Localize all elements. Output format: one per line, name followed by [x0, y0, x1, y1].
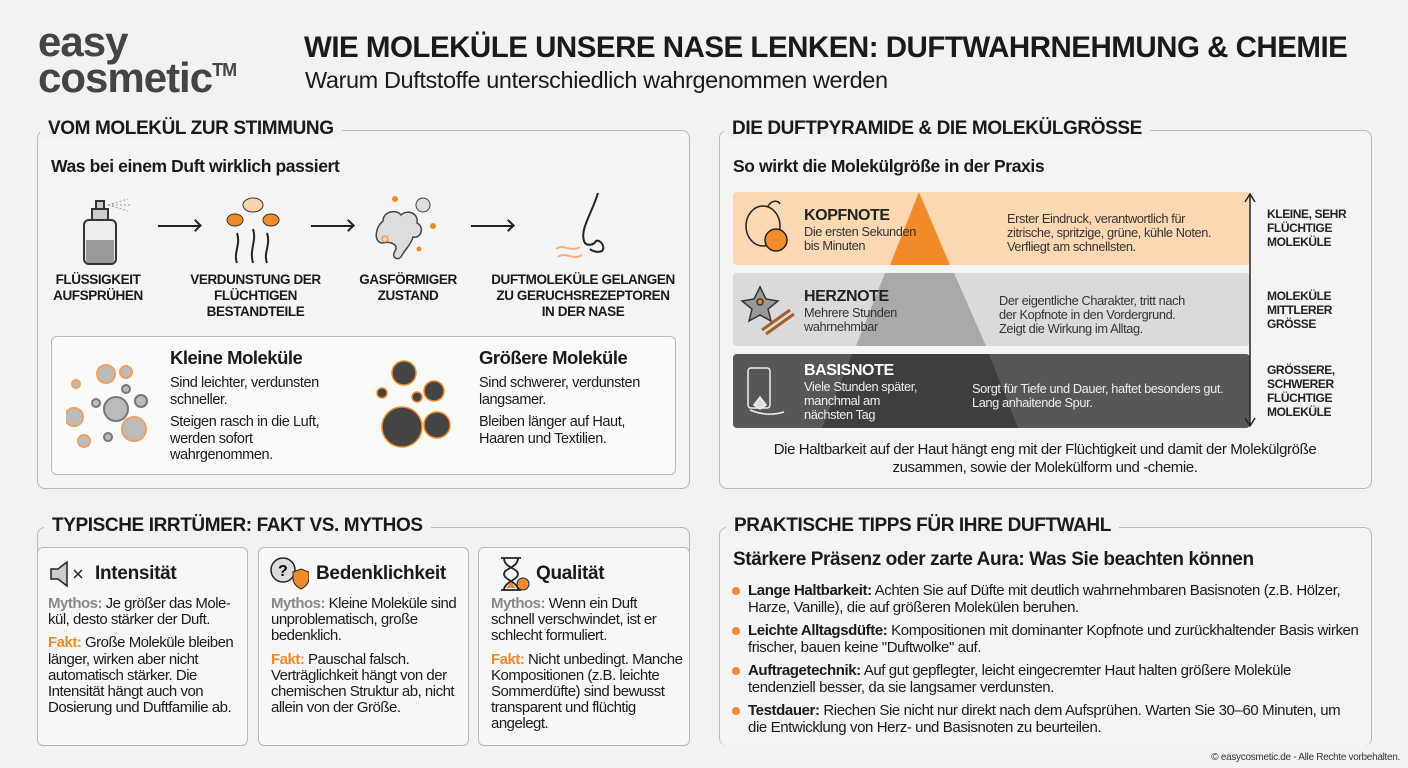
icon: nose: [556, 192, 604, 258]
text: Verfliegt am schnellsten.: [1007, 239, 1136, 254]
text: größere moleküle: Größere Moleküle: [479, 347, 627, 368]
text: manchmal am: [804, 393, 880, 408]
text: MOLEKÜLE: [1267, 404, 1332, 419]
card: qualität: [478, 547, 690, 746]
text: Mehrere Stunden: [804, 305, 897, 320]
tips list: Testdauer: Riechen Sie nicht nur direkt nach dem Aufsprühen. Warten Sie 30–60 Minuten, um die Entwicklung von Herz- und Basisnoten zu beurteilen.: [748, 702, 1340, 736]
heading: DIE DUFTPYRAMIDE & DIE MOLEKÜLGRÖSSE: [732, 118, 1142, 139]
text: größere moleküle: [479, 347, 640, 446]
panel: vom molekül zur stimmung: ZU GERUCHSREZEPTOREN: [496, 288, 670, 303]
text: SCHWERER: [1267, 377, 1335, 391]
logo: easy: [38, 18, 127, 65]
panel: vom molekül zur stimmung: [37, 130, 690, 489]
card: bedenklichkeit: [258, 547, 469, 746]
panel: vom molekül zur stimmung: BESTANDTEILE: [207, 304, 304, 319]
text: MOLEKÜLE: [1267, 234, 1332, 249]
tips list: Lange Haltbarkeit: Achten Sie auf Düfte mit deutlich wahrnehmbaren Basisnoten (z.B. Hölzer, Harze, Vanille), die auf größeren Molekülen beruhen.: [748, 582, 1340, 616]
icon: question shield: ?: [278, 563, 287, 580]
text: GRÖSSE: [1267, 316, 1316, 331]
text: kleine moleküle: Kleine Moleküle: [170, 347, 302, 368]
text: FLÜCHTIGE: [1267, 220, 1332, 235]
heading: PRAKTISCHE TIPPS FÜR IHRE DUFTWAHL: [734, 515, 1111, 536]
text: Die ersten Sekunden: [804, 224, 916, 239]
icon: gas cloud: [376, 196, 436, 260]
footer copyright: © easycosmetic.de - Alle Rechte vorbehalten.: [1211, 752, 1400, 763]
text: bis Minuten: [804, 238, 865, 253]
title: WIE MOLEKÜLE UNSERE NASE LENKEN: DUFTWAHRNEHMUNG & CHEMIE: [304, 31, 1347, 64]
subheading: Stärkere Präsenz oder zarte Aura: Was Sie beachten können: [733, 549, 1254, 570]
text: Viele Stunden später,: [804, 379, 917, 394]
tips list: Auftragetechnik: Auf gut gepflegter, leicht eingecremter Haut halten größere Moleküle tendenziell besser, da sie langsamer verdunsten.: [748, 662, 1291, 696]
icon: hourglass: [501, 557, 530, 591]
card: molecules: [51, 336, 676, 475]
text: [803, 207, 1347, 422]
heading: TYPISCHE IRRTÜMER: FAKT VS. MYTHOS: [52, 515, 423, 536]
subheading: So wirkt die Molekülgröße in der Praxis: [733, 156, 1044, 176]
card: qualität: Qualität: [536, 563, 604, 584]
arrow: [158, 225, 200, 227]
text: kleine moleküle: [170, 347, 319, 463]
card: qualität: Fakt: Nicht unbedingt. Manche Kompositionen (z.B. leichte Sommerdüfte) sind bewusst transparent und flüchtig angelegt.: [491, 651, 682, 732]
card: intensität: Intensität: [95, 563, 176, 584]
captions: [53, 272, 143, 303]
icon: small molecules: [66, 364, 148, 448]
card: intensität: [37, 547, 248, 746]
panel: praktische tipps: [719, 527, 1372, 746]
text: KOPFNOTE: [804, 207, 890, 224]
text: MOLEKÜLE: [1267, 288, 1332, 303]
arrow: [311, 225, 353, 227]
pyramid chart: [733, 192, 1347, 428]
panel: vom molekül zur stimmung: FLÜCHTIGEN: [214, 288, 297, 303]
panel: irrtümer: [37, 527, 690, 746]
panel: vom molekül zur stimmung: IN DER NASE: [542, 304, 624, 319]
text: FLÜCHTIGE: [1267, 390, 1332, 405]
panel: vom molekül zur stimmung: DUFTMOLEKÜLE GELANGEN: [491, 272, 675, 287]
tips list: [732, 582, 1358, 736]
text: größere moleküle: Sind schwerer, verdunsten langsamer.: [479, 375, 640, 408]
icon: speaker: [50, 560, 82, 588]
icons: [746, 201, 787, 251]
captions: AUFSPRÜHEN: [53, 288, 143, 303]
arrow: [471, 225, 513, 227]
text: größere moleküle: Bleiben länger auf Haut, Haaren und Textilien.: [479, 414, 625, 446]
card: bedenklichkeit: Bedenklichkeit: [316, 563, 446, 584]
logo: [38, 18, 236, 101]
text: kleine moleküle: Steigen rasch in die Luft, werden sofort wahrgenommen.: [170, 414, 319, 463]
text: der Kopfnote in den Vordergrund.: [999, 307, 1175, 322]
text: zitrische, spritzige, grüne, kühle Noten.: [1007, 225, 1211, 240]
text: wahrnehmbar: [803, 319, 879, 334]
text: Erster Eindruck, verantwortlich für: [1007, 211, 1186, 226]
card: qualität: Mythos: Wenn ein Duft schnell verschwindet, ist er schlecht formuliert.: [491, 595, 656, 644]
icon: spray bottle: [83, 198, 130, 265]
logo: cosmeticTM: [38, 54, 236, 101]
card: bedenklichkeit: Fakt: Pauschal falsch. Verträglichkeit hängt von der chemischen Struktur ab, nicht allein von der Größe.: [271, 651, 454, 716]
text: nächsten Tag: [804, 407, 875, 422]
text: kleine moleküle: Sind leichter, verdunsten schneller.: [170, 375, 319, 408]
text: HERZNOTE: [804, 288, 890, 305]
subheading: Was bei einem Duft wirklich passiert: [51, 156, 339, 176]
text: KLEINE, SEHR: [1267, 207, 1347, 221]
text: BASISNOTE: [804, 362, 894, 379]
panel: vom molekül zur stimmung: GASFÖRMIGER: [359, 272, 457, 287]
captions: FLÜSSIGKEIT: [56, 272, 140, 287]
text: Der eigentliche Charakter, tritt nach: [999, 293, 1185, 308]
icon: evaporation: [226, 198, 280, 264]
icon: question shield: [270, 557, 309, 590]
heading: VOM MOLEKÜL ZUR STIMMUNG: [48, 118, 334, 139]
card: bedenklichkeit: Mythos: Kleine Moleküle sind unproblematisch, große bedenklich.: [271, 595, 456, 644]
text: Sorgt für Tiefe und Dauer, haftet besonders gut.: [972, 381, 1223, 396]
pyramid caption: Die Haltbarkeit auf der Haut hängt eng mit der Flüchtigkeit und damit der Molekülgröße zusammen, sowie der Molekülform und -chemie.: [774, 441, 1316, 476]
subtitle: Warum Duftstoffe unterschiedlich wahrgenommen werden: [305, 67, 888, 93]
card: intensität: Fakt: Große Moleküle bleiben länger, wirken aber nicht automatisch stärker. Die Intensität hängt auch von Dosierung und Duftfamilie ab.: [48, 634, 233, 716]
icon: large molecules: [376, 360, 451, 448]
tips list: Leichte Alltagsdüfte: Kompositionen mit dominanter Kopfnote und zurückhaltender Basis wirken frischer, bauen keine "Duftwolke" auf.: [748, 622, 1358, 656]
text: Zeigt die Wirkung im Alltag.: [999, 321, 1143, 336]
panel: vom molekül zur stimmung: VERDUNSTUNG DER: [190, 272, 321, 287]
text: Lang anhaitende Spur.: [972, 395, 1092, 410]
text: MITTLERER: [1267, 303, 1333, 317]
text: GRÖSSERE,: [1267, 362, 1335, 377]
panel: duftpyramide: [719, 130, 1372, 489]
panel: vom molekül zur stimmung: ZUSTAND: [378, 288, 438, 303]
card: intensität: Mythos: Je größer das Mole-kül, desto stärker der Duft.: [48, 595, 230, 628]
